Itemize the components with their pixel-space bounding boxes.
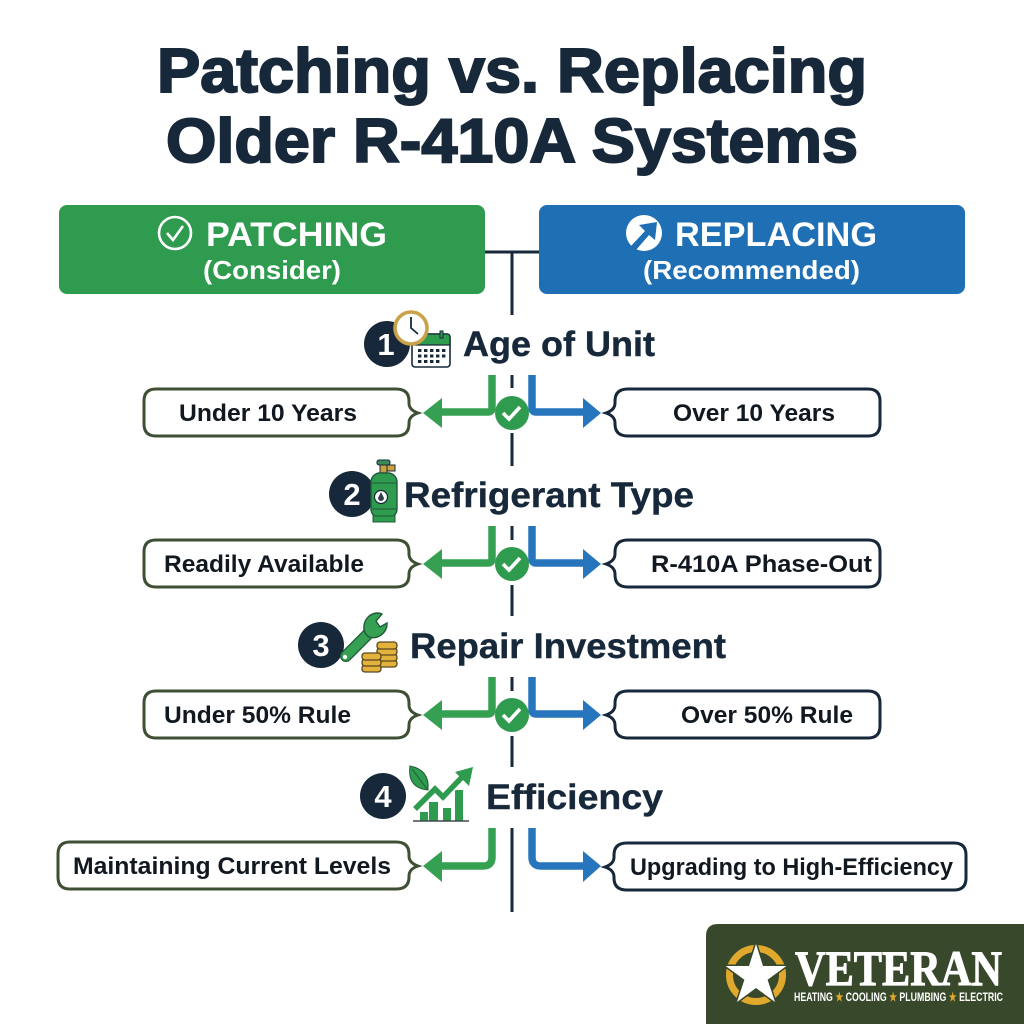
blue arrow — [532, 828, 601, 882]
right callout: Over 50% Rule — [681, 702, 853, 729]
heading: Repair Investment — [410, 627, 726, 666]
number badge 4 — [360, 773, 406, 819]
left callout — [144, 691, 418, 738]
icon: check circle — [159, 217, 191, 249]
row 2: refrigerant type — [144, 460, 880, 587]
right callout: Upgrading to High-Efficiency — [630, 854, 954, 881]
left callout: Under 50% Rule — [164, 702, 351, 729]
row 1: age of unit — [144, 312, 880, 436]
icon: star in gold ring — [726, 944, 786, 1002]
title — [157, 37, 867, 176]
row 4: efficiency — [58, 766, 966, 890]
number badge 4: 4 — [374, 779, 392, 814]
left callout — [144, 389, 418, 436]
icon: arrow circle — [626, 215, 662, 251]
icon: wrench and coins — [343, 613, 397, 672]
panel: replacing header — [539, 205, 965, 294]
check badge — [495, 698, 529, 732]
center spine — [485, 252, 539, 912]
number badge 2 — [329, 471, 375, 517]
icon: refrigerant cylinder — [371, 460, 397, 522]
right callout — [606, 389, 880, 436]
title: Older R-410A Systems — [166, 107, 858, 176]
panel: patching header: PATCHING — [206, 216, 387, 254]
logo: veteran: HEATING ★ COOLING ★ PLUMBING ★ ELECTRIC — [794, 990, 1003, 1004]
title: Patching vs. Replacing — [157, 37, 867, 106]
left callout: Under 10 Years — [179, 400, 357, 427]
logo: veteran — [706, 924, 1024, 1024]
check badge — [495, 396, 529, 430]
icon: leaf and rising chart — [410, 766, 473, 821]
panel: patching header — [59, 205, 485, 294]
number badge 3 — [298, 622, 344, 668]
row 3: repair investment — [144, 613, 880, 738]
right callout — [606, 540, 880, 587]
green arrow — [423, 828, 492, 882]
blue arrow — [532, 526, 601, 579]
panel: replacing header: REPLACING — [675, 216, 877, 254]
icon: calendar and clock — [395, 312, 450, 367]
panel: replacing header: (Recommended) — [643, 255, 860, 285]
heading: Refrigerant Type — [404, 476, 694, 515]
green arrow — [423, 526, 492, 579]
left callout: Readily Available — [164, 551, 364, 578]
green arrow — [423, 375, 492, 428]
heading: Age of Unit — [463, 325, 655, 364]
right callout — [606, 691, 880, 738]
right callout: R-410A Phase-Out — [651, 551, 872, 578]
left callout: Maintaining Current Levels — [73, 853, 391, 880]
right callout: Over 10 Years — [673, 400, 835, 427]
check badge — [495, 547, 529, 581]
number badge 2: 2 — [343, 477, 361, 512]
panel: patching header: (Consider) — [203, 255, 341, 285]
heading: Efficiency — [486, 778, 664, 817]
left callout — [144, 540, 418, 587]
green arrow — [423, 677, 492, 730]
left callout — [58, 842, 418, 889]
number badge 3: 3 — [312, 628, 330, 663]
blue arrow — [532, 677, 601, 730]
blue arrow — [532, 375, 601, 428]
number badge 1 — [364, 321, 410, 367]
right callout — [605, 843, 966, 890]
number badge 1: 1 — [377, 327, 395, 362]
